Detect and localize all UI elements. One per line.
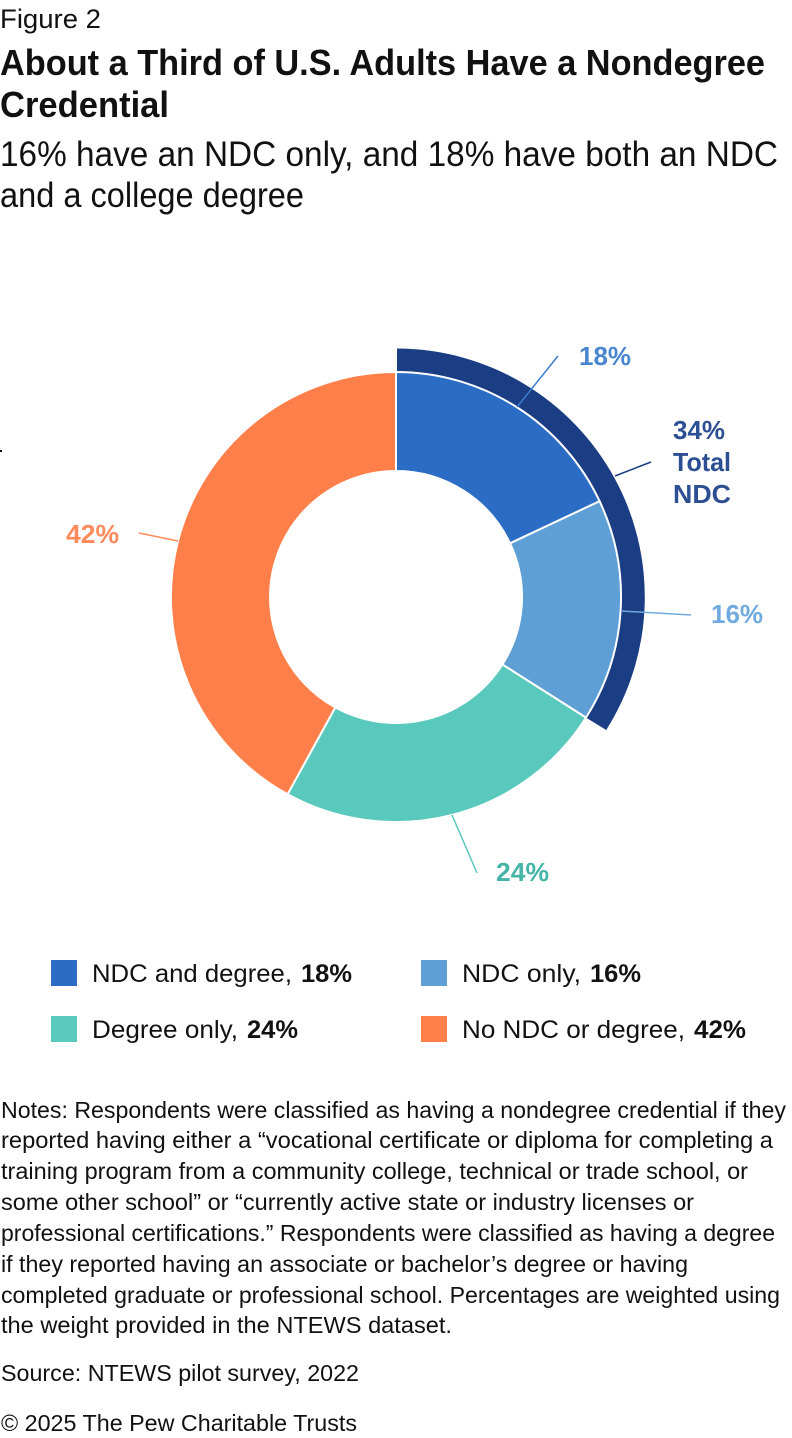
data label: 18%: 18% xyxy=(579,341,631,371)
legend item: NDC only: NDC only, xyxy=(462,960,581,988)
notes: reported having either a “vocational certificate or diploma for completing a xyxy=(1,1127,773,1153)
data label: 34% total NDC: 34% xyxy=(673,415,725,445)
notes: training program from a community college, technical or trade school, or xyxy=(1,1158,748,1184)
segment: NDC only 16% xyxy=(502,501,621,718)
leader line: 18% xyxy=(517,356,558,407)
leader line: 34% xyxy=(615,462,651,476)
data label: 34% total NDC: Total xyxy=(673,447,731,477)
leader line: 16% xyxy=(621,611,691,615)
title: Credential xyxy=(0,84,169,125)
legend xyxy=(51,960,746,1044)
data label: 34% total NDC xyxy=(673,415,731,509)
figure label: Figure 2 xyxy=(0,4,101,34)
title: About a Third of U.S. Adults Have a Nondegree xyxy=(0,42,765,83)
subtitle: and a college degree xyxy=(0,176,304,215)
notes: professional certifications.” Respondents were classified as having a degree xyxy=(1,1220,775,1246)
subtitle xyxy=(0,135,778,215)
legend item: NDC only xyxy=(421,960,641,988)
notes: the weight provided in the NTEWS dataset. xyxy=(1,1312,452,1338)
segment: degree only 24% xyxy=(288,664,586,822)
legend item: NDC and degree: 18% xyxy=(301,960,352,988)
leader line: 42% xyxy=(139,533,178,541)
legend item: No NDC or degree xyxy=(421,1016,746,1044)
outer ring: total NDC 34% xyxy=(397,348,645,730)
copyright: © 2025 The Pew Charitable Trusts xyxy=(1,1410,357,1436)
notes: if they reported having an associate or bachelor’s degree or having xyxy=(1,1251,688,1277)
legend item: Degree only xyxy=(51,1016,298,1044)
leader line: 24% xyxy=(452,815,477,873)
data label: 34% total NDC: NDC xyxy=(673,479,731,509)
legend item: Degree only: 24% xyxy=(247,1016,298,1044)
data label: 16%: 16% xyxy=(711,599,763,629)
segment: NDC and degree 18% xyxy=(396,372,600,543)
data label: 24%: 24% xyxy=(496,857,549,887)
legend item: No NDC or degree: 42% xyxy=(694,1016,746,1044)
notes: completed graduate or professional school. Percentages are weighted using xyxy=(1,1282,780,1308)
donut chart xyxy=(66,341,763,887)
data label: 42%: 42% xyxy=(66,519,119,549)
legend item: NDC only: 16% xyxy=(590,960,641,988)
segment: no NDC or degree 42% xyxy=(171,372,396,794)
notes xyxy=(1,1097,786,1338)
title xyxy=(0,42,765,125)
source: Source: NTEWS pilot survey, 2022 xyxy=(1,1360,359,1386)
legend item: NDC and degree: NDC and degree, xyxy=(92,960,292,988)
legend item: Degree only: Degree only, xyxy=(92,1016,238,1044)
notes: Notes: Respondents were classified as having a nondegree credential if they xyxy=(1,1097,786,1123)
notes: some other school” or “currently active state or industry licenses or xyxy=(1,1189,694,1215)
legend item: No NDC or degree: No NDC or degree, xyxy=(462,1016,685,1044)
legend item: NDC and degree xyxy=(51,960,352,988)
